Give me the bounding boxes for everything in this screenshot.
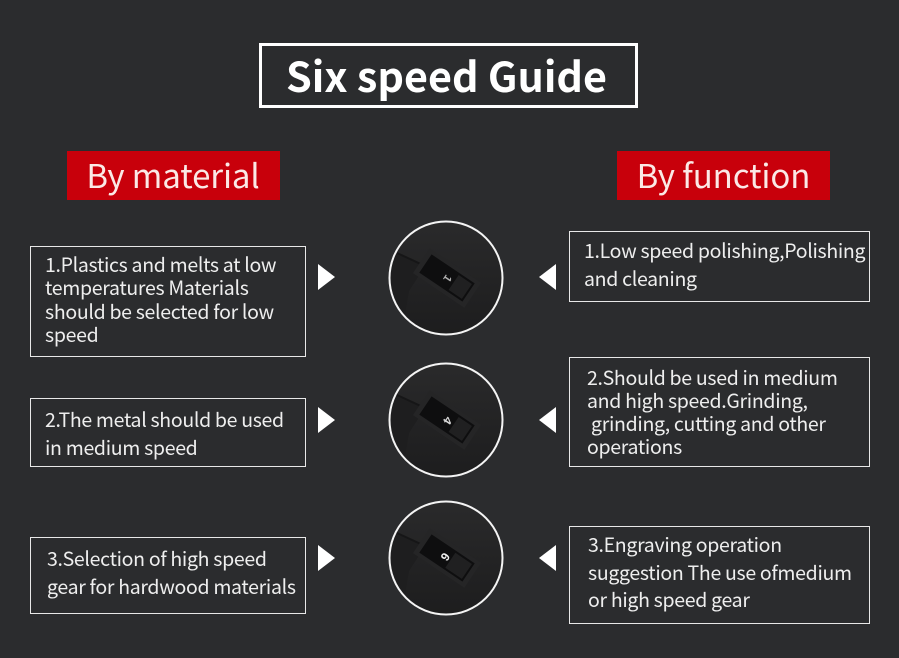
- panel: material 2: [30, 398, 306, 467]
- icon: speed dial set to 4: [388, 362, 504, 478]
- panel: material 3: 3.Selection of high speed: [47, 543, 267, 572]
- panel: function 2: [569, 357, 870, 467]
- panel: material 1: [30, 246, 306, 357]
- arrow: right 2: [318, 407, 335, 433]
- panel: material 3: gear for hardwood materials: [47, 571, 296, 600]
- panel: function 1: [569, 231, 870, 302]
- panel: function 1: and cleaning: [584, 263, 697, 292]
- panel: function 2: 2.Should be used in medium: [587, 362, 838, 391]
- panel: function 1: 1.Low speed polishing,Polishing: [584, 235, 865, 264]
- panel: material 2: in medium speed: [45, 432, 197, 460]
- panel: material 1: temperatures Materials: [45, 272, 249, 301]
- arrow: left 2: [539, 407, 556, 433]
- panel: function 2: grinding, cutting and other: [591, 408, 826, 437]
- arrow: left 1: [539, 264, 556, 290]
- panel: material 3: [30, 537, 306, 614]
- heading: by material: By material: [86, 150, 260, 198]
- panel: function 3: or high speed gear: [588, 584, 750, 613]
- panel: function 2: and high speed.Grinding,: [587, 385, 808, 414]
- title: Six speed Guide: [286, 44, 607, 104]
- panel: function 3: [569, 526, 870, 624]
- icon: speed dial set to 6: [388, 500, 504, 616]
- icon: speed dial set to 6: 6: [437, 550, 453, 564]
- arrow: right 1: [318, 264, 335, 290]
- icon: speed dial set to 4: 4: [440, 414, 455, 427]
- panel: material 1: speed: [45, 319, 98, 348]
- panel: material 2: 2.The metal should be used: [45, 404, 284, 433]
- panel: material 1: 1.Plastics and melts at low: [45, 249, 276, 278]
- panel: function 3: 3.Engraving operation: [588, 529, 782, 558]
- panel: function 2: operations: [587, 431, 682, 460]
- heading: by function: By function: [637, 150, 810, 198]
- icon: speed dial set to 1: [388, 220, 504, 336]
- icon: speed dial set to 1: 1: [440, 272, 454, 284]
- arrow: right 3: [318, 545, 335, 571]
- panel: function 3: suggestion The use ofmedium: [588, 556, 852, 586]
- panel: material 1: should be selected for low: [45, 296, 274, 325]
- arrow: left 3: [539, 545, 556, 571]
